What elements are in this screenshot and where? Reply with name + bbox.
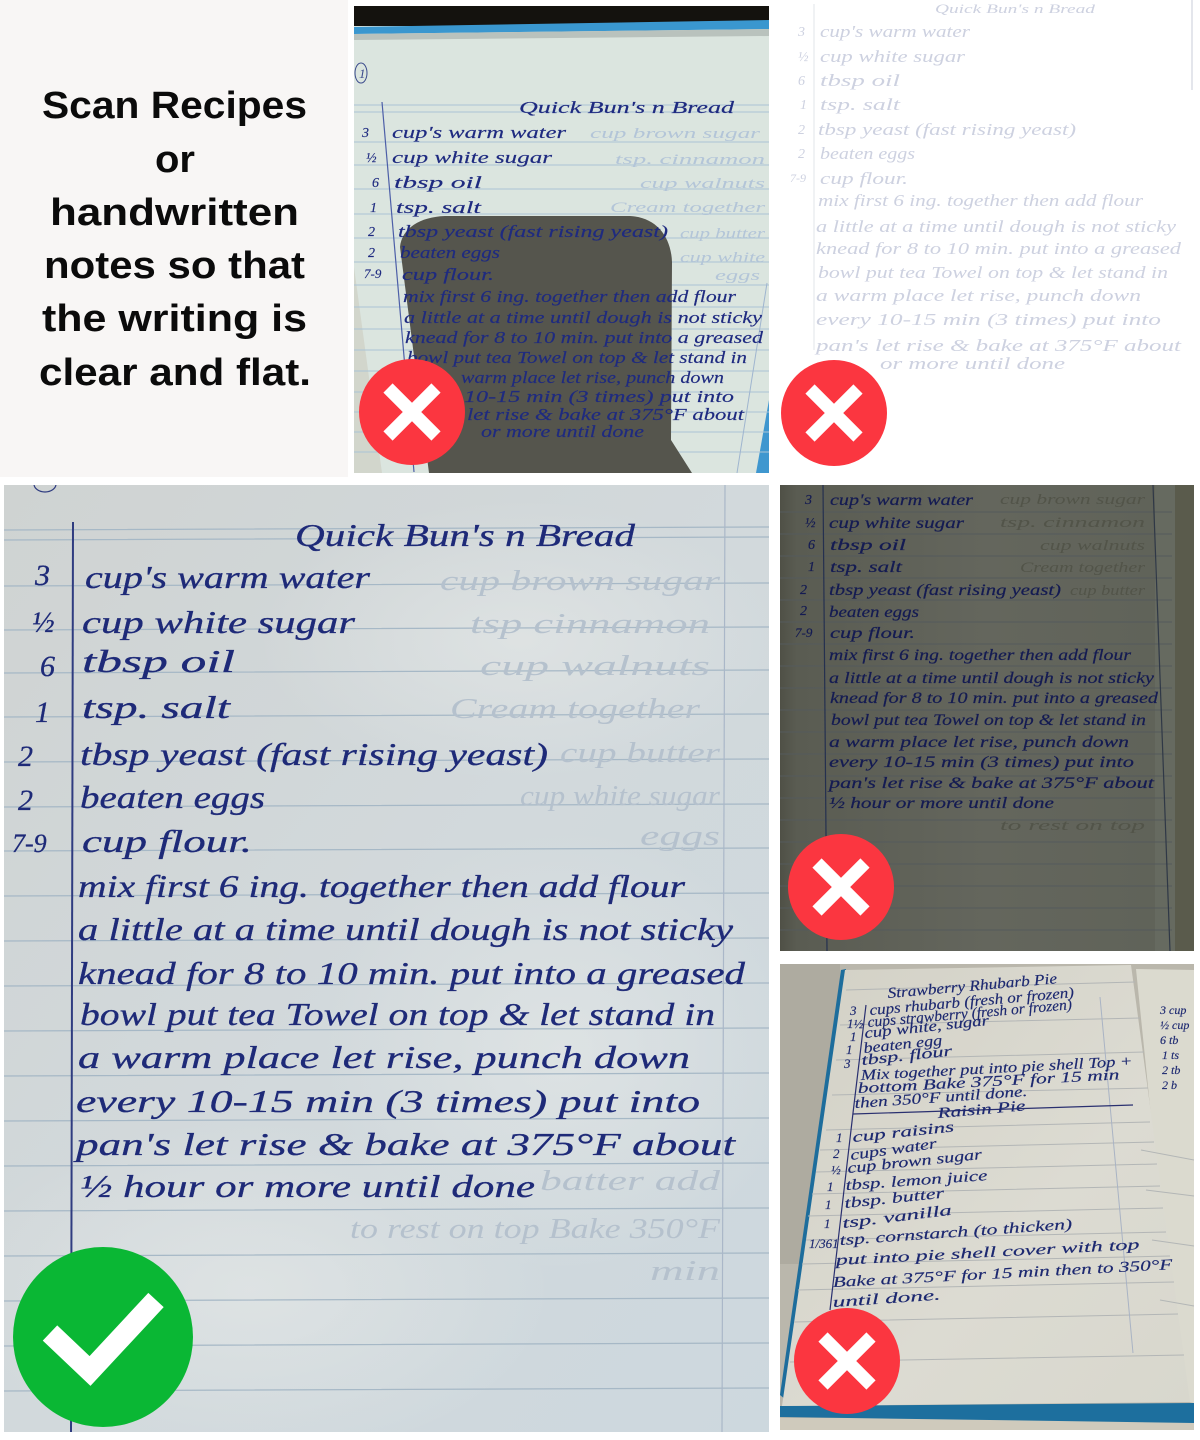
handwritten recipe: cup white sugar <box>392 148 553 167</box>
book cover blue edge and base <box>780 969 846 1400</box>
angled handwritten recipes: 3 cup <box>1159 1003 1186 1017</box>
handwritten recipe: a little at a time until dough is not sticky <box>78 911 734 947</box>
handwritten recipe: tbsp oil <box>82 643 235 679</box>
angled handwritten recipes: 1 <box>827 1179 834 1194</box>
icon: red cross, angled photo <box>794 1308 900 1414</box>
angled handwritten recipes: cup white, sugar <box>864 1013 990 1042</box>
handwritten recipe: 1 <box>370 201 377 216</box>
bleed-through writing: Cream together <box>1020 560 1145 576</box>
handwritten recipe: ½ <box>32 606 54 639</box>
angled handwritten recipes: 6 tb <box>1160 1033 1178 1047</box>
icon: red cross, shadow photo <box>359 359 465 465</box>
panel: title block <box>0 0 348 477</box>
bleed-through writing: to rest on top Bake 350°F <box>350 1214 721 1245</box>
bleed-through writing: min <box>650 1256 720 1287</box>
bleed-through writing: cup butter <box>560 738 720 769</box>
dark handwritten recipe: pan's let rise & bake at 375°F about <box>828 775 1155 792</box>
panel: bad example too dark <box>780 485 1194 951</box>
dark handwritten recipe: a little at a time until dough is not sticky <box>829 670 1155 687</box>
dark handwritten recipe: cup flour. <box>830 625 915 642</box>
panel: good example clear and flat <box>0 476 800 1440</box>
page number circle: 1 <box>359 66 366 81</box>
dark handwritten recipe: cup white sugar <box>829 515 965 532</box>
handwritten recipe: Quick Bun's n Bread <box>295 517 636 553</box>
handwritten recipe <box>12 517 746 1204</box>
angled handwritten recipes: ½ <box>831 1162 841 1177</box>
angled handwritten recipes: 1 ts <box>1162 1048 1179 1062</box>
bleed-through writing <box>590 126 766 284</box>
handwritten recipe: knead for 8 to 10 min. put into a greased <box>405 328 764 347</box>
icon: red cross, dark photo <box>788 834 894 940</box>
bleed-through writing: tsp. cinnamon <box>615 152 765 168</box>
dark handwritten recipe: tbsp oil <box>830 537 907 554</box>
faint handwritten recipe: pan's let rise & bake at 375°F about <box>815 336 1183 355</box>
dark handwritten recipe: ½ hour or more until done <box>829 795 1054 812</box>
heading: scan recipes instruction: handwritten <box>50 192 299 234</box>
faint handwritten recipe: cup flour. <box>820 169 908 188</box>
handwritten recipe <box>361 98 764 441</box>
faint handwritten recipe: a little at a time until dough is not sticky <box>816 217 1177 236</box>
handwritten recipe: cup's warm water <box>85 559 371 595</box>
handwritten recipe: tbsp oil <box>394 173 482 192</box>
handwritten recipe: bowl put tea Towel on top & let stand in <box>80 996 715 1032</box>
dark handwritten recipe: tsp. salt <box>830 559 903 576</box>
faint handwritten recipe: cup's warm water <box>820 22 970 41</box>
bleed-through writing: cup walnuts <box>640 176 765 192</box>
angled handwritten recipes: 1 <box>836 1130 842 1145</box>
heading: scan recipes instruction: notes so that <box>44 245 305 287</box>
bleed-through writing: tsp. cinnamon <box>1000 515 1145 531</box>
bleed-through writing: tsp cinnamon <box>470 609 710 640</box>
bleed-through writing: cup butter <box>1070 583 1145 599</box>
handwritten recipe: 2 <box>18 784 33 817</box>
handwritten recipe: cup white sugar <box>82 604 356 640</box>
dark handwritten recipe: 7-9 <box>795 625 813 640</box>
faint handwritten recipe: Quick Bun's n Bread <box>935 1 1096 16</box>
angled handwritten recipes: Mix together put into pie shell Top + <box>859 1054 1133 1084</box>
right page <box>1136 969 1194 1403</box>
faint handwritten recipe: ½ <box>798 50 809 65</box>
bleed-through writing: eggs <box>640 821 720 852</box>
faint handwritten recipe: 2 <box>798 147 805 162</box>
dark handwritten recipe: 1 <box>808 560 815 575</box>
angled handwritten recipes: bottom Bake 375°F for 15 min <box>857 1067 1120 1097</box>
faint handwritten recipe: tbsp oil <box>820 71 900 90</box>
angled handwritten recipes: 2 tb <box>1162 1063 1180 1077</box>
handwritten recipe: ½ <box>366 151 377 166</box>
handwritten recipe: a warm place let rise, punch down <box>78 1039 690 1075</box>
angled handwritten recipes <box>809 971 1189 1311</box>
handwritten recipe: tsp. salt <box>396 198 483 217</box>
handwritten recipe: cup flour. <box>82 823 252 859</box>
icon: red cross, faint photo <box>781 360 887 466</box>
margin line <box>382 102 414 472</box>
handwritten recipe: a little at a time until dough is not sticky <box>404 308 763 327</box>
handwritten recipe: Quick Bun's n Bread <box>519 98 735 117</box>
faint handwritten recipe: cup white sugar <box>820 47 966 66</box>
page number circle <box>34 485 56 493</box>
panel: bad example too faint <box>790 0 1193 369</box>
angled handwritten recipes: cups strawberry (fresh or frozen) <box>867 997 1073 1031</box>
faint handwritten recipe: mix first 6 ing. together then add flour <box>818 191 1143 210</box>
handwritten recipe: tbsp yeast (fast rising yeast) <box>398 222 668 241</box>
angled handwritten recipes: tbsp. flour <box>861 1044 953 1069</box>
heading: scan recipes instruction: or <box>155 139 195 181</box>
dark handwritten recipe: every 10-15 min (3 times) put into <box>829 754 1134 771</box>
faint handwritten recipe: every 10-15 min (3 times) put into <box>816 310 1161 329</box>
angled handwritten recipes: until done. <box>832 1287 941 1311</box>
faint handwritten recipe: beaten eggs <box>820 144 915 163</box>
page number circle <box>355 63 367 83</box>
handwritten recipe: cup's warm water <box>392 123 567 142</box>
faint handwritten recipe: tbsp yeast (fast rising yeast) <box>818 120 1076 139</box>
angled handwritten recipes: beaten egg <box>863 1033 944 1057</box>
angled handwritten recipes: 1 <box>850 1029 856 1044</box>
handwritten recipe: mix first 6 ing. together then add flour <box>403 287 736 306</box>
handwritten recipe: let rise & bake at 375°F about <box>467 405 746 424</box>
angled handwritten recipes: 1 <box>825 1197 832 1212</box>
handwritten recipe: 6 <box>372 176 379 191</box>
faint handwritten recipe: 6 <box>798 74 805 89</box>
faint handwritten recipe: 7-9 <box>790 171 806 185</box>
bleed-through writing: batter add <box>540 1166 722 1197</box>
handwritten recipe: 1 <box>35 696 50 729</box>
handwritten recipe: 2 <box>368 225 375 240</box>
bleed-through writing: cup brown sugar <box>1000 492 1145 508</box>
panel: bad example with shadow <box>354 6 769 473</box>
heading: scan recipes instruction: Scan Recipes <box>42 85 307 127</box>
bleed-through writing: to rest on top <box>1000 818 1146 834</box>
angled handwritten recipes: 1½ <box>847 1016 864 1031</box>
panel: bad example angled book <box>780 964 1194 1430</box>
handwritten recipe: 10-15 min (3 times) put into <box>464 387 734 406</box>
handwritten recipe: 2 <box>18 740 33 773</box>
bleed-through writing: eggs <box>715 268 760 284</box>
handwritten recipe: 3 <box>361 126 369 141</box>
handwritten recipe: every 10-15 min (3 times) put into <box>76 1083 700 1119</box>
handwritten recipe: beaten eggs <box>80 779 265 815</box>
faint handwritten recipe: bowl put tea Towel on top & let stand in <box>818 263 1168 282</box>
bleed-through writing: cup brown sugar <box>590 126 760 142</box>
bleed-through writing: cup brown sugar <box>440 566 720 597</box>
angled handwritten recipes: 1/361 <box>809 1236 839 1251</box>
handwritten recipe: ½ hour or more until done <box>80 1168 535 1204</box>
heading: scan recipes instruction: the writing is <box>42 298 307 340</box>
faint handwritten recipe: or more until done <box>880 354 1066 373</box>
angled handwritten recipes: put into pie shell cover with top <box>834 1237 1141 1269</box>
dark handwritten recipe: beaten eggs <box>829 604 919 621</box>
dark handwritten recipe: bowl put tea Towel on top & let stand in <box>831 712 1146 729</box>
angled handwritten recipes: ½ cup <box>1160 1018 1189 1032</box>
handwritten recipe: 7-9 <box>364 266 382 281</box>
dark handwritten recipe: knead for 8 to 10 min. put into a greased <box>830 690 1159 707</box>
angled handwritten recipes: cups rhubarb (fresh or frozen) <box>869 985 1075 1019</box>
handwritten recipe: warm place let rise, punch down <box>461 368 724 387</box>
faint handwritten recipe: tsp. salt <box>820 95 902 114</box>
icon: green check mark <box>13 1247 193 1427</box>
handwritten recipe: bowl put tea Towel on top & let stand in <box>407 348 747 367</box>
dark handwritten recipe: tbsp yeast (fast rising yeast) <box>829 582 1061 599</box>
dark handwritten recipe: ½ <box>805 516 816 531</box>
heading: scan recipes instruction: clear and flat. <box>39 352 311 394</box>
handwritten recipe: mix first 6 ing. together then add flour <box>78 868 686 904</box>
handwritten recipe: tbsp yeast (fast rising yeast) <box>80 736 548 772</box>
angled handwritten recipes: cups water <box>849 1136 938 1164</box>
angled handwritten recipes: Bake at 375°F for 15 min then to 350°F <box>832 1257 1174 1291</box>
angled handwritten recipes: 2 <box>833 1146 840 1161</box>
faint handwritten recipe: 1 <box>800 98 807 113</box>
faint handwritten recipe: a warm place let rise, punch down <box>816 286 1141 305</box>
bleed-through writing <box>1000 492 1146 834</box>
faint handwritten recipe <box>790 1 1183 373</box>
dark handwritten recipe: 3 <box>804 493 812 508</box>
bleed-through writing: cup white <box>680 250 766 266</box>
angled handwritten recipes: tbsp. butter <box>844 1186 945 1212</box>
dark handwritten recipe: 6 <box>808 538 815 553</box>
angled handwritten recipes: 2 b <box>1162 1078 1177 1092</box>
faint handwritten recipe: 2 <box>798 123 805 138</box>
angled handwritten recipes: 3 <box>843 1056 851 1071</box>
dark handwritten recipe: mix first 6 ing. together then add flour <box>829 647 1132 664</box>
dark handwritten recipe: cup's warm water <box>830 492 974 509</box>
handwritten recipe: cup flour. <box>402 265 494 284</box>
dark handwritten recipe: 2 <box>800 583 807 598</box>
dark handwritten recipe <box>795 492 1159 812</box>
angled handwritten recipes: Raisin Pie <box>936 1098 1026 1122</box>
angled handwritten recipes: tsp. vanilla <box>842 1203 953 1232</box>
bleed-through writing: cup white sugar <box>520 781 720 812</box>
handwritten recipe: beaten eggs <box>400 243 500 262</box>
handwritten recipe: pan's let rise & bake at 375°F about <box>73 1126 737 1162</box>
handwritten recipe: 6 <box>40 650 55 683</box>
handwritten recipe: knead for 8 to 10 min. put into a greased <box>78 955 746 991</box>
angled handwritten recipes: cup raisins <box>852 1119 955 1146</box>
bleed-through writing: cup walnuts <box>1040 538 1145 554</box>
bleed-through writing: cup walnuts <box>480 651 710 682</box>
handwritten recipe: 2 <box>368 246 375 261</box>
angled handwritten recipes: then 350°F until done. <box>854 1084 1028 1112</box>
angled handwritten recipes: tsp. cornstarch (to thicken) <box>839 1217 1073 1249</box>
bleed-through writing: Cream together <box>450 694 700 725</box>
heading: scan recipes instruction <box>39 85 311 394</box>
faint handwritten recipe: 3 <box>797 25 805 40</box>
dark handwritten recipe: a warm place let rise, punch down <box>829 734 1129 751</box>
angled handwritten recipes: 1 <box>824 1216 830 1231</box>
dark handwritten recipe: 2 <box>800 604 807 619</box>
angled handwritten recipes: tbsp. lemon juice <box>845 1168 988 1194</box>
bleed-through writing: Cream together <box>610 200 765 216</box>
handwritten recipe: tsp. salt <box>82 689 232 725</box>
angled handwritten recipes: 3 <box>849 1003 857 1018</box>
angled handwritten recipes: cup brown sugar <box>847 1147 983 1177</box>
handwritten recipe: 3 <box>34 559 50 592</box>
angled handwritten recipes: 1 <box>846 1042 852 1057</box>
bleed-through writing <box>350 566 722 1287</box>
faint handwritten recipe: knead for 8 to 10 min. put into a greased <box>816 239 1182 258</box>
angled handwritten recipes: Strawberry Rhubarb Pie <box>887 971 1058 1002</box>
shadow of phone <box>400 216 692 473</box>
left page <box>782 965 1190 1406</box>
handwritten recipe: 7-9 <box>12 829 47 858</box>
bleed-through writing: cup butter <box>680 226 765 242</box>
handwritten recipe: or more until done <box>481 422 645 441</box>
